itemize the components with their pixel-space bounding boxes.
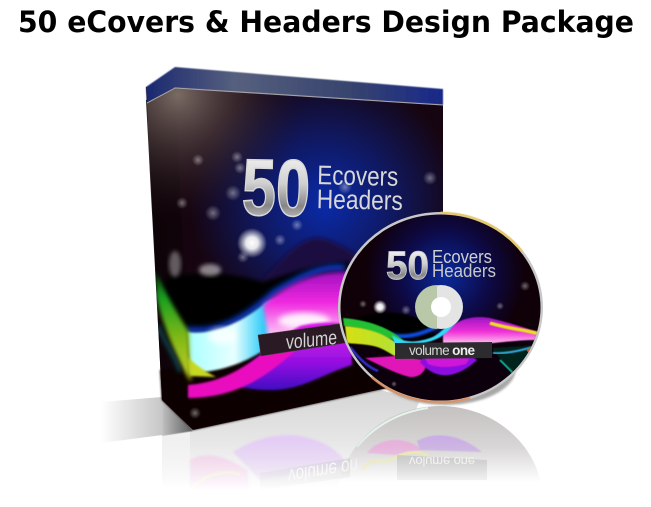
- reflected rim: [357, 408, 428, 447]
- reflected label: [260, 458, 350, 480]
- reflected pink lobe: [190, 455, 248, 482]
- rim rainbow top right: [440, 213, 522, 252]
- disc hub: [415, 285, 463, 329]
- disc logo: Headers: [432, 261, 496, 281]
- disc reflection details: [357, 408, 487, 480]
- box logo: Headers: [316, 184, 403, 216]
- box logo: Ecovers: [317, 160, 399, 192]
- box highlight: [147, 88, 443, 300]
- disc logo: [386, 244, 496, 288]
- reflected yellow curve: [198, 471, 240, 482]
- reflected magenta lobe: [367, 440, 423, 455]
- disc floor reflection: [337, 406, 543, 505]
- box logo: [241, 143, 404, 235]
- lid edge line: [147, 88, 443, 105]
- reflected disc label: [397, 455, 487, 480]
- disc volume label: volume one: [409, 343, 475, 358]
- reflected yellow wave: [362, 452, 428, 470]
- reflected disc text: volume one: [409, 454, 475, 469]
- box reflection: [162, 432, 357, 484]
- box volume label: volume: [286, 327, 337, 354]
- product box: [146, 67, 443, 430]
- box waves: [156, 238, 385, 398]
- disc rim: [338, 212, 543, 403]
- disc logo: Ecovers: [432, 247, 492, 267]
- box front sky: [146, 87, 443, 430]
- reflected purple lobe: [233, 435, 348, 480]
- bottom dark band: [160, 340, 443, 430]
- bokeh lights: [169, 151, 437, 419]
- reflected spine: [162, 432, 190, 446]
- disc logo: 50: [386, 244, 429, 288]
- rim rainbow bottom: [372, 377, 470, 402]
- disc volume label: [395, 342, 492, 359]
- reflected text: volume on: [288, 454, 358, 487]
- title: 50 eCovers & Headers Design Package: [18, 5, 634, 39]
- reflected purple lobe: [417, 435, 482, 452]
- box logo: 50: [241, 143, 311, 233]
- disc bokeh: [359, 281, 530, 387]
- box lid: [146, 67, 443, 105]
- box left spine: [146, 88, 193, 430]
- box volume label: [258, 323, 345, 356]
- disc waves: [343, 312, 540, 402]
- floor and cast shadows: [101, 390, 420, 495]
- disc face: [340, 214, 540, 400]
- disc: [338, 212, 543, 403]
- disc shadow: [374, 331, 516, 405]
